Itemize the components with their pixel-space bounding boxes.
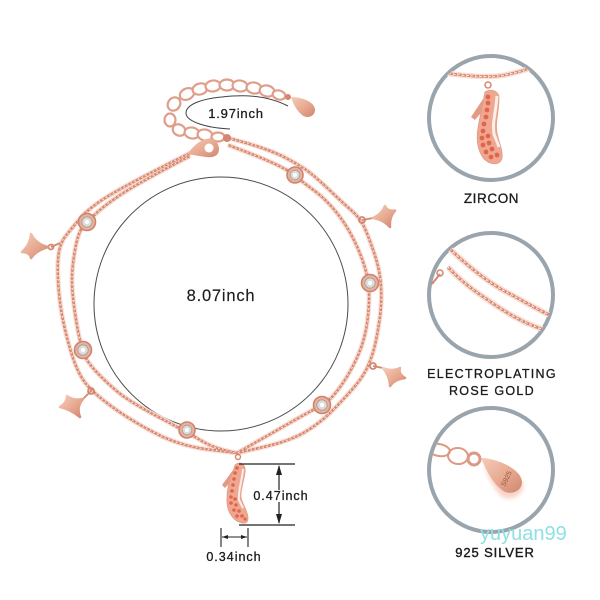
panel: zircon detail [429,56,553,180]
label: electroplating rose gold: ROSE GOLD [449,384,535,398]
station bottom [179,422,195,438]
panel: 925 silver detail [427,408,553,532]
station upper left [78,214,96,230]
extender chain with tag [164,80,315,157]
icon: 925 tag: S925 [500,470,514,488]
height dimension: 0.47inch [239,464,309,525]
charm left [22,234,48,258]
charm lower left [60,396,83,417]
label: bracelet length: 8.07inch [187,287,255,305]
shoe pendant [222,454,248,523]
measurement circle: 8.07inch [94,177,348,431]
charm lower right [383,368,405,386]
extender length arc and label [186,96,288,129]
crystal stations [74,167,378,438]
icon: lobster clasp [187,139,219,157]
label: shoe height: 0.47inch [253,489,309,503]
label: 925 silver: 925 SILVER [455,545,535,560]
label: shoe width: 0.34inch [206,550,262,564]
station lower right [314,396,330,414]
station right [362,274,378,292]
label: 1.97inch: 1.97inch [208,106,264,121]
icon: tag [291,97,315,117]
label: electroplating rose gold: ELECTROPLATING [427,367,557,381]
panel: electroplating detail [429,233,553,357]
bracelet chains [58,138,381,453]
charm upper right [373,206,395,227]
label: electroplating rose gold [427,367,557,398]
width dimension: 0.34inch [206,528,262,564]
watermark: yuyuan99 [480,523,567,545]
station lower left [74,342,92,358]
icon: shoe closeup [471,90,502,164]
charm rings [48,217,383,399]
station upper right [287,167,303,183]
label: zircon: ZIRCON [464,191,519,206]
star charms [22,206,405,417]
